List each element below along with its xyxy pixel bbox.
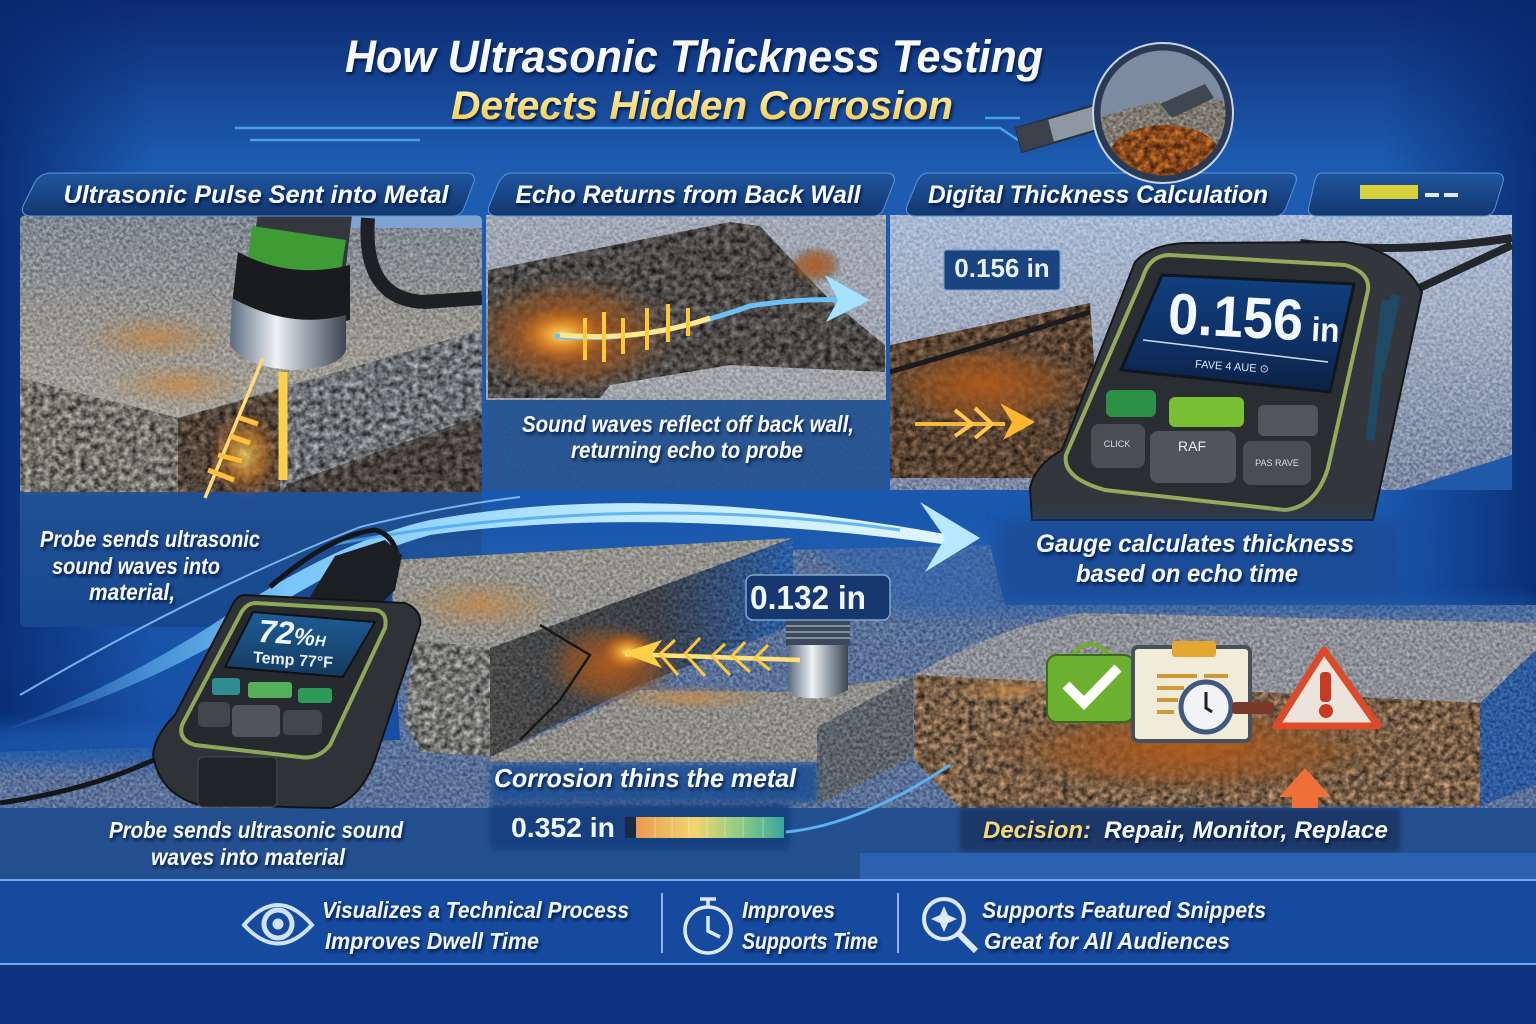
caption: decision: Decision:: [983, 817, 1091, 844]
pale rubble band: [600, 365, 885, 398]
lower rust: [600, 684, 780, 712]
tab: pulse: [22, 173, 474, 216]
panel 1 caption: sound waves into: [52, 553, 220, 579]
left screen reading: 72%H: [257, 613, 329, 654]
device: hand gauge right: [1030, 238, 1512, 520]
gauge screen: [1121, 275, 1354, 392]
reading: 0.132 in: [746, 575, 890, 620]
left screen temp: Temp 77°F: [253, 649, 334, 672]
gauge buttons: PAS RAVE: [1255, 458, 1299, 468]
caption band: [486, 400, 886, 490]
slab right face: [178, 330, 482, 495]
icon: magnifying glass: [1016, 43, 1235, 185]
bottom caption bands: [0, 804, 1536, 879]
reading: thickness meter: 0.352 in: [511, 812, 615, 843]
ground top fade left: [0, 725, 180, 765]
footer text 1: Visualizes a Technical Process: [322, 897, 629, 923]
footer text 3: Supports Featured Snippets: [982, 897, 1266, 923]
echo arrow: [512, 275, 870, 365]
caption: gauge calculates: [1000, 520, 1400, 598]
tab: echo: [488, 173, 894, 216]
caption: probe sends: Probe sends ultrasonic sound: [109, 817, 404, 843]
raised ridge: [488, 222, 885, 398]
left gauge buttons: [198, 678, 332, 737]
slab: corrosion: [393, 538, 913, 805]
footer text 2: [742, 897, 878, 954]
reading: thickness meter: [511, 765, 950, 843]
panel 1 caption: [40, 526, 260, 605]
panel 1 caption: Probe sends ultrasonic: [40, 526, 260, 552]
caption: corrosion thins: Corrosion thins the metal: [494, 763, 797, 793]
footer text 1: Improves Dwell Time: [325, 928, 539, 954]
face rust: [540, 620, 680, 710]
icon: stopwatch: [685, 899, 731, 953]
probe on corrosion: [786, 620, 850, 698]
slab corner rust: [178, 390, 280, 495]
decision top face: [914, 613, 1536, 703]
icon: up arrow: [1279, 768, 1331, 808]
gauge buttons: CLICK: [1104, 439, 1130, 449]
tab: echo: Echo Returns from Back Wall: [516, 181, 862, 209]
tab: pulse: Ultrasonic Pulse Sent into Metal: [64, 181, 450, 209]
probe: [230, 215, 482, 370]
footer band: [0, 880, 1536, 1024]
footer text 2: Improves: [742, 897, 835, 923]
crack line: [890, 312, 1090, 372]
decision right face: [1480, 650, 1536, 806]
slab left face: [20, 378, 178, 495]
panel 1 sky sliver: [350, 216, 482, 228]
title accent lines: [235, 118, 1030, 148]
left gauge screen: [225, 612, 375, 677]
panel 1 surface: [20, 216, 482, 418]
slab: decision: [914, 613, 1536, 808]
caption: probe sends: [109, 817, 404, 870]
crack: [520, 625, 590, 740]
upper left face: [405, 640, 490, 757]
caption band: corrosion: [490, 764, 817, 802]
gauge buttons: [1091, 390, 1318, 485]
upper top face rust: [395, 575, 565, 635]
panel: ultrasonic pulse: [20, 215, 482, 627]
footer text 3: [982, 897, 1266, 954]
left gauge port: [198, 757, 277, 807]
caption: gauge calculates: based on echo time: [1076, 560, 1298, 588]
rust ridge: [890, 303, 1100, 478]
right gauge body: [1030, 242, 1422, 520]
decision rust: [945, 676, 1405, 796]
icon: green check: [1047, 644, 1134, 722]
arrow: main process swoosh: [5, 497, 980, 730]
screen divider: [1143, 340, 1328, 362]
screen labels: FAVE 4 AUE ⊙: [1195, 359, 1269, 376]
title: Detects Hidden Corrosion: [451, 84, 953, 128]
right gauge cables: [1300, 238, 1512, 290]
ultrasonic pulse beams: [205, 358, 283, 499]
icon: magnifier star: [924, 899, 976, 951]
caption: gauge calculates: Gauge calculates thickness: [1036, 530, 1354, 558]
right gauge side grips: [1370, 295, 1396, 440]
footer text 2: Supports Time: [742, 928, 878, 954]
panel 2 caption: [522, 411, 854, 463]
title: [345, 31, 1043, 128]
panel 1 caption: material,: [89, 579, 175, 605]
lower top face: [490, 677, 913, 762]
caption: decision: [983, 817, 1388, 844]
left gauge connector: [310, 540, 402, 605]
tab: digital: Digital Thickness Calculation: [928, 181, 1268, 209]
tab: signal indicator: [1308, 173, 1503, 216]
reading: 0.132 in: 0.132 in: [750, 579, 866, 616]
panel 2 caption: returning echo to probe: [571, 437, 803, 463]
lower caption zone: [20, 492, 482, 627]
tab: digital: [906, 173, 1296, 216]
footer text 1: [322, 897, 629, 954]
readout label: [944, 250, 1060, 290]
title: How Ultrasonic Thickness Testing: [345, 31, 1043, 82]
left gauge bezel: [181, 603, 386, 758]
panel 1 rust patches: [91, 316, 246, 406]
panel: echo returns: [460, 215, 886, 490]
device: hand gauge left: [0, 530, 420, 808]
gauge buttons: RAF: [1178, 438, 1206, 454]
caption: probe sends: waves into material: [151, 844, 346, 870]
panel: lower scene background: [0, 530, 1536, 855]
left gauge cables: [0, 530, 398, 803]
left gauge body: [153, 595, 420, 808]
ground below slab: [280, 415, 482, 495]
echo arrow left: [600, 632, 800, 676]
blue haze on upper ground: [400, 530, 1536, 615]
lower right face: [817, 677, 913, 805]
panel: digital thickness: [875, 215, 1512, 500]
decision front face: [914, 675, 1480, 808]
screen reading: 0.156 in: [1167, 281, 1342, 355]
rust glow: [890, 345, 1084, 426]
caption: decision: Repair, Monitor, Replace: [1104, 817, 1388, 844]
panel 2 caption: Sound waves reflect off back wall,: [522, 411, 854, 437]
icon: eye: [244, 905, 312, 944]
icon: warning triangle: [1276, 650, 1378, 726]
pulse arrow: [915, 403, 1035, 440]
ridge rust: [486, 246, 842, 392]
right gauge bezel: [1066, 255, 1368, 510]
upper dark face: [490, 538, 793, 757]
lower corner: [1402, 455, 1512, 490]
upper top face: [393, 538, 793, 648]
footer text 3: Great for All Audiences: [984, 928, 1230, 954]
icon: clipboard: [1133, 641, 1274, 741]
readout label: 0.156 in: [954, 253, 1050, 283]
